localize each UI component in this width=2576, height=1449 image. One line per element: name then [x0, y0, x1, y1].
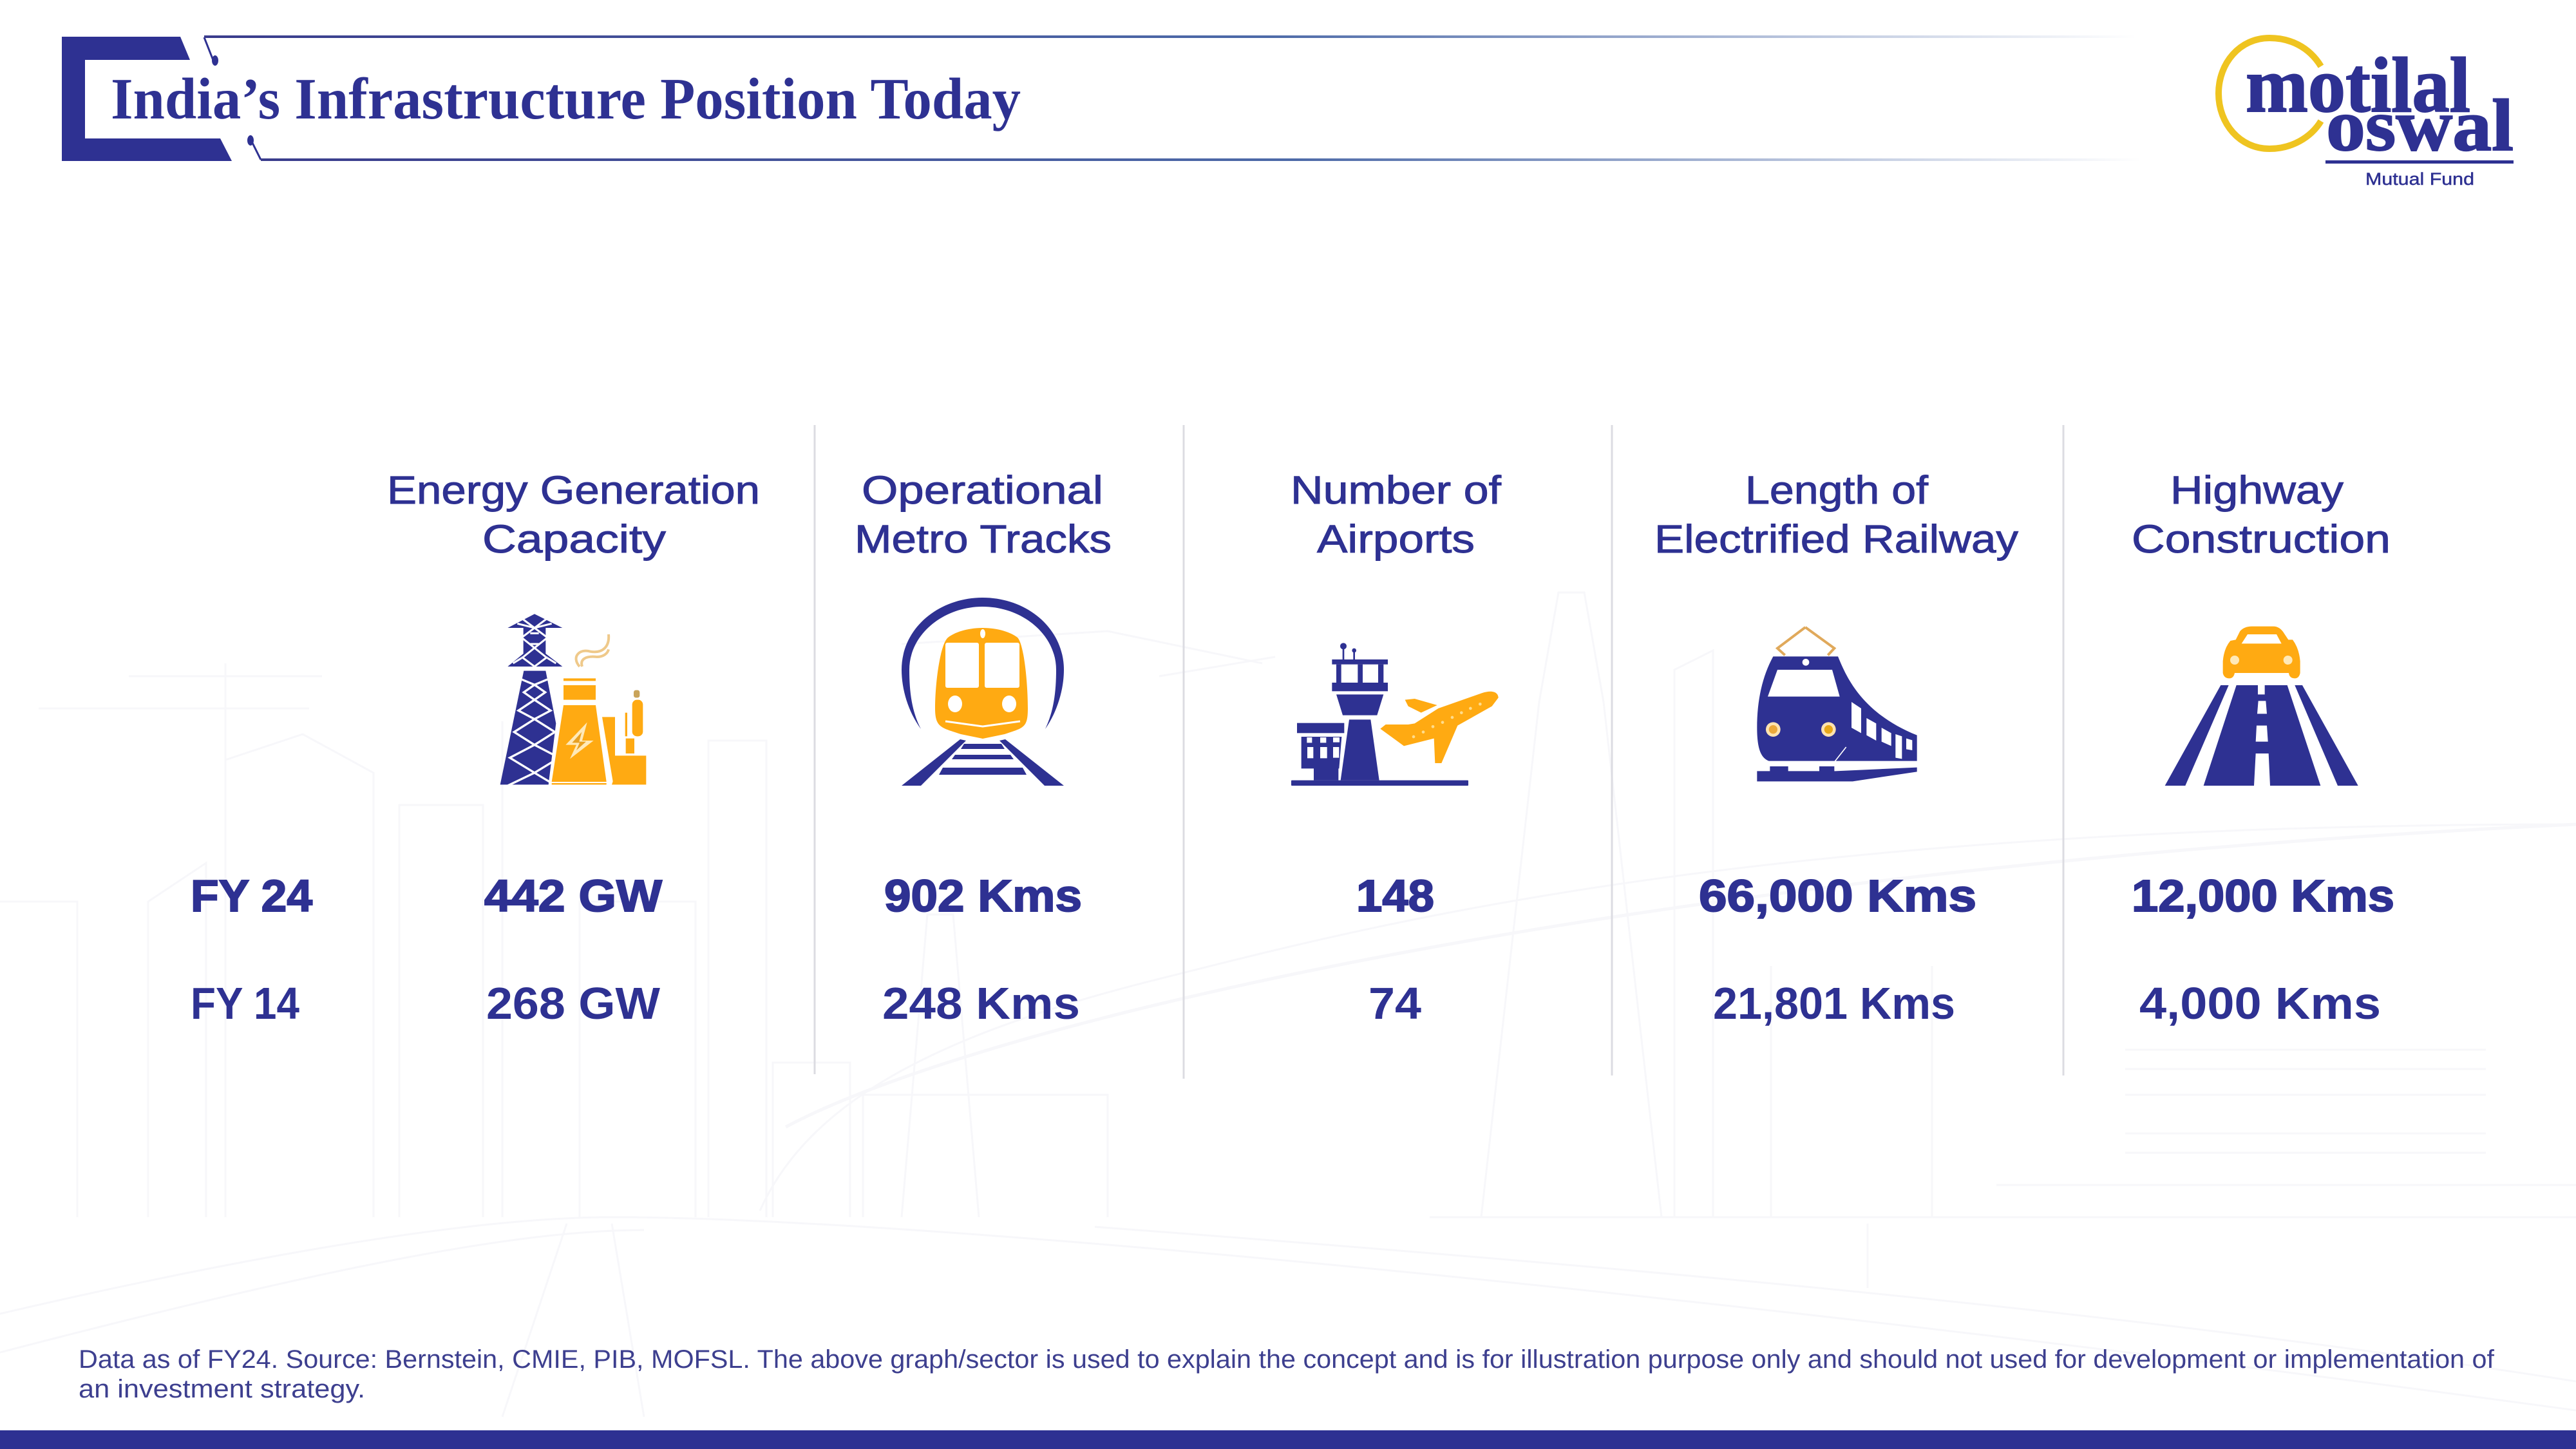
FY24 values — [484, 871, 2394, 921]
column headings: Number of — [1291, 468, 1502, 512]
FY24 values: 66,000 Kms — [1699, 871, 1976, 921]
column dividers — [815, 425, 2063, 1079]
logo — [2219, 38, 2514, 189]
FY24 values: 902 Kms — [884, 871, 1082, 921]
background: faint city and bridge line art — [0, 592, 2576, 1417]
FY14 values: 21,801 Kms — [1713, 978, 1955, 1028]
column headings: Metro Tracks — [855, 517, 1112, 561]
column headings: Highway — [2170, 468, 2344, 512]
row labels: FY 24 — [191, 871, 312, 921]
row labels — [191, 871, 312, 1028]
row labels: FY 14 — [191, 978, 299, 1028]
FY14 values: 74 — [1368, 978, 1421, 1028]
column headings: Energy Generation — [387, 468, 760, 512]
FY14 values: 268 GW — [486, 978, 660, 1028]
FY14 values: 248 Kms — [882, 978, 1080, 1028]
icon: airport tower and plane — [1291, 643, 1499, 786]
logo: oswal — [2326, 84, 2514, 166]
bottom band — [0, 1430, 2576, 1449]
FY24 values: 148 — [1356, 871, 1434, 921]
icon: electrified railway train — [1757, 627, 1917, 781]
logo: motilal — [2246, 42, 2470, 129]
logo: Mutual Fund — [2365, 169, 2474, 189]
column headings: Length of — [1745, 468, 1929, 512]
FY14 values: 4,000 Kms — [2139, 978, 2381, 1028]
FY24 values: 12,000 Kms — [2132, 871, 2394, 921]
title: India’s Infrastructure Position Today — [111, 66, 1021, 131]
column headings: Airports — [1317, 517, 1475, 561]
column headings: Electrified Railway — [1654, 517, 2019, 561]
footnote: Data as of FY24. Source: Bernstein, CMIE, PIB, MOFSL. The above graph/sector is used to explain the concept and is for illustration purpose only and should not used for development or implementation of — [79, 1345, 2495, 1374]
icon: metro train — [902, 598, 1064, 786]
column headings — [387, 468, 2391, 561]
footnote — [79, 1345, 2495, 1403]
FY24 values: 442 GW — [484, 871, 662, 921]
icon: highway with car — [2165, 627, 2358, 786]
column headings: Construction — [2132, 517, 2391, 561]
footnote: an investment strategy. — [79, 1375, 365, 1403]
icon: energy pylon and power plant — [500, 614, 646, 786]
header bracket — [62, 35, 2141, 161]
column headings: Operational — [862, 468, 1103, 512]
column headings: Capacity — [482, 517, 667, 561]
FY14 values — [486, 978, 2381, 1028]
